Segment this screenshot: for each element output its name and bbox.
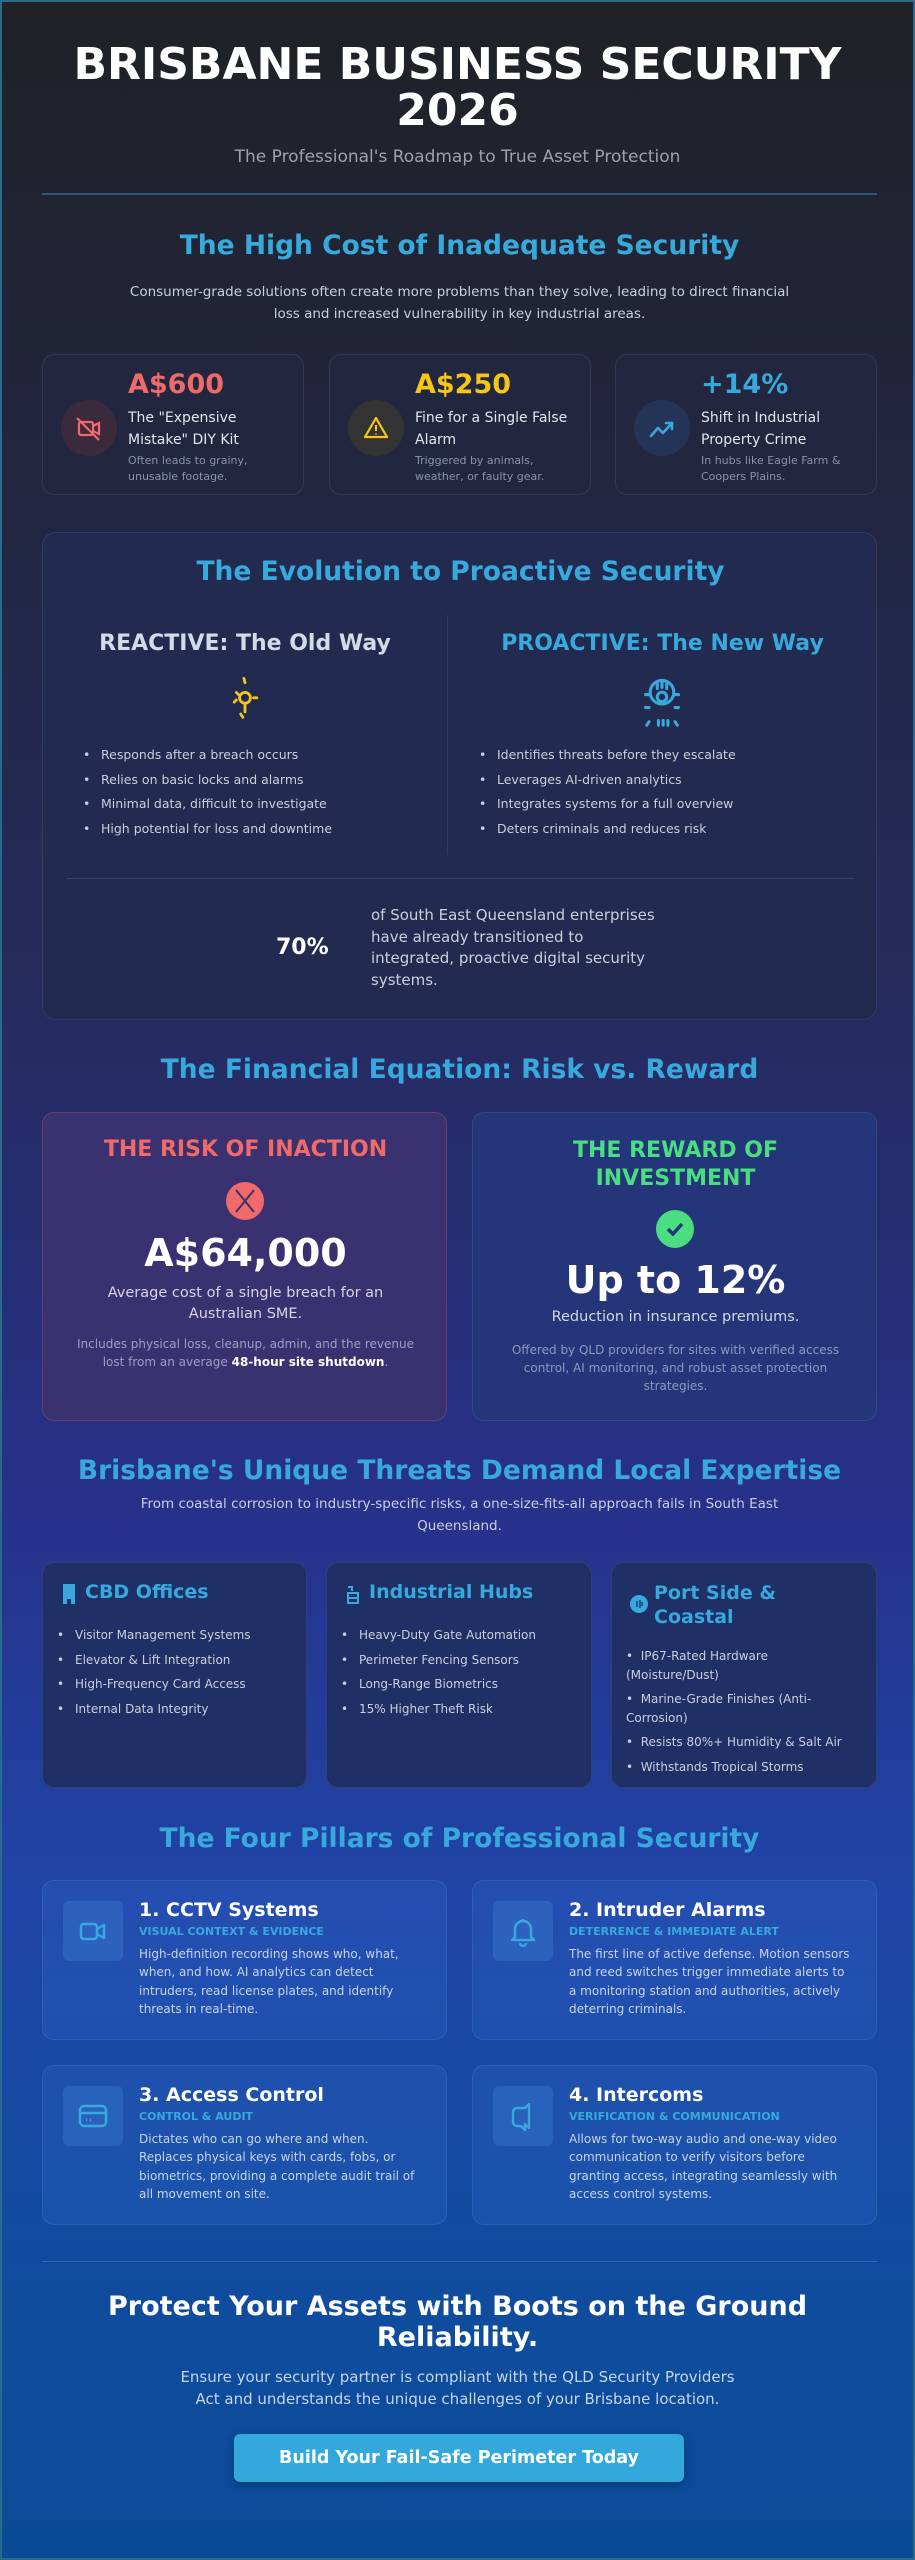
- list: proactive: [480, 747, 736, 836]
- card: CBD Offices: Elevator & Lift Integration: [75, 1652, 230, 1666]
- card: A$250: weather, or faulty gear.: [415, 470, 544, 483]
- card: +14%: +14%: [701, 369, 788, 400]
- pillar: Intruder Alarms: deterring criminals.: [569, 2002, 686, 2016]
- cta button: [234, 2434, 684, 2482]
- list: reactive: Relies on basic locks and alarms: [101, 772, 304, 786]
- pillar: Access Control: 3. Access Control: [139, 2084, 324, 2106]
- panel: reward of investment: [472, 1112, 877, 1421]
- panel: risk of inaction: lost from an average 48-hour site shutdown.: [103, 1355, 388, 1369]
- pillar: Intruder Alarms: and reed switches trigger immediate alerts to: [569, 1965, 844, 1979]
- panel: reward of investment: Offered by QLD providers for sites with verified access: [512, 1343, 839, 1357]
- icon: coastal: [630, 1595, 648, 1613]
- panel: risk of inaction: Average cost of a single breach for an: [108, 1285, 383, 1301]
- panel: reward of investment: INVESTMENT: [596, 1166, 755, 1191]
- heading: local threats: Brisbane's Unique Threats Demand Local Expertise: [78, 1455, 841, 1486]
- column: reactive: [84, 631, 391, 836]
- pillar: CCTV: [42, 1880, 447, 2040]
- heading: financial: The Financial Equation: Risk vs. Reward: [161, 1054, 758, 1085]
- card: +14%: Shift in Industrial: [701, 410, 820, 426]
- pillar: Intruder Alarms: 2. Intruder Alarms: [569, 1899, 766, 1921]
- card: +14%: Coopers Plains.: [701, 470, 785, 483]
- card: Industrial Hubs: Perimeter Fencing Sensors: [359, 1652, 519, 1666]
- card: A$250: [329, 354, 591, 495]
- card: A$250: Triggered by animals,: [415, 454, 533, 467]
- list: reactive: Responds after a breach occurs: [101, 747, 298, 762]
- card: CBD Offices: CBD Offices: [85, 1581, 209, 1603]
- icon: speech: [493, 2086, 553, 2146]
- list: reactive: [84, 747, 332, 836]
- card: A$600: Often leads to grainy,: [128, 454, 247, 467]
- pillar: Intercoms: [472, 2065, 877, 2225]
- stat: 70%: 70%: [276, 935, 329, 960]
- icon: x circle: [226, 1182, 264, 1220]
- panel: reward of investment: THE REWARD OF: [573, 1138, 778, 1163]
- list: proactive: Identifies threats before they escalate: [497, 747, 736, 762]
- icon: trend up: [634, 400, 690, 456]
- card: Port Side & Coastal: Coastal: [654, 1606, 734, 1628]
- cta button: Build Your Fail-Safe Perimeter Today: [279, 2448, 639, 2468]
- column: proactive: PROACTIVE: The New Way: [501, 631, 824, 656]
- card: A$250: Fine for a Single False: [415, 410, 567, 426]
- card: Industrial Hubs: Heavy-Duty Gate Automation: [359, 1628, 536, 1642]
- icon: ai eye: [644, 678, 680, 727]
- list: reactive: High potential for loss and downtime: [101, 820, 332, 836]
- pillar: CCTV: when, and how. AI analytics can detect: [139, 1965, 374, 1979]
- card: +14%: Property Crime: [701, 432, 806, 448]
- card: +14%: [615, 354, 877, 495]
- pillar: CCTV: intruders, read license plates, and identify: [139, 1984, 393, 1998]
- stat: 70%: integrated, proactive digital security: [371, 949, 645, 967]
- panel: reward of investment: strategies.: [644, 1379, 707, 1393]
- heading: evolution: The Evolution to Proactive Security: [196, 556, 725, 587]
- card: Port Side & Coastal: (Moisture/Dust) • Marine-Grade Finishes (Anti-: [626, 1668, 811, 1706]
- intro paragraph: Consumer-grade solutions often create more problems than they solve, leading to direct financial: [130, 284, 789, 300]
- title: 2026: [396, 85, 519, 136]
- panel: reward of investment: Reduction in insurance premiums.: [552, 1309, 799, 1325]
- pillar: Intruder Alarms: The first line of active defense. Motion sensors: [569, 1947, 850, 1961]
- card: Industrial Hubs: 15% Higher Theft Risk: [359, 1702, 493, 1716]
- card: CBD Offices: High-Frequency Card Access: [75, 1677, 246, 1691]
- cta heading: [108, 2291, 807, 2353]
- panel: evolution: [42, 532, 877, 1020]
- cta text: Ensure your security partner is compliant with the QLD Security Providers: [180, 2368, 735, 2386]
- card: A$250: A$250: [415, 369, 511, 400]
- pillar: Intercoms: communication to verify visitors before: [569, 2150, 805, 2164]
- icon: industrial: [347, 1586, 359, 1604]
- icon: bell: [493, 1901, 553, 1961]
- panel: reward of investment: control, AI monitoring, and robust asset protection: [524, 1361, 827, 1375]
- icon: card: [63, 2086, 123, 2146]
- icon: building: [63, 1584, 75, 1604]
- panel: risk of inaction: Australian SME.: [189, 1306, 302, 1322]
- intro paragraph: [130, 284, 789, 322]
- stat: 70%: [276, 906, 655, 988]
- pillar: Access Control: Dictates who can go where and when.: [139, 2132, 368, 2146]
- cta heading: Protect Your Assets with Boots on the Ground: [108, 2291, 807, 2322]
- stat: 70%: of South East Queensland enterprises: [371, 906, 655, 924]
- intro paragraph: loss and increased vulnerability in key industrial areas.: [274, 306, 645, 322]
- panel: risk of inaction: Includes physical loss, cleanup, admin, and the revenue: [77, 1337, 414, 1351]
- list: proactive: Deters criminals and reduces risk: [497, 820, 707, 836]
- card: Industrial Hubs: [326, 1562, 592, 1788]
- heading: four pillars: The Four Pillars of Professional Security: [160, 1823, 759, 1854]
- cta text: Act and understands the unique challenges of your Brisbane location.: [196, 2390, 719, 2408]
- icon: lightbulb: [232, 677, 258, 719]
- pillar: CCTV: threats in real-time.: [139, 2002, 258, 2016]
- pillar: CCTV: High-definition recording shows who, what,: [139, 1947, 399, 1961]
- card: CBD Offices: Visitor Management Systems: [75, 1628, 251, 1642]
- stat cards: [42, 354, 877, 495]
- stat: 70%: have already transitioned to: [371, 928, 583, 946]
- card: A$600: The "Expensive: [128, 410, 237, 426]
- card: Port Side & Coastal: Corrosion) • Resists 80%+ Humidity & Salt Air • Withstands Tropical Storms: [626, 1710, 842, 1774]
- pillar: Intruder Alarms: DETERRENCE & IMMEDIATE ALERT: [569, 1925, 779, 1938]
- list: reactive: Minimal data, difficult to investigate: [101, 796, 327, 811]
- column: reactive: REACTIVE: The Old Way: [99, 631, 391, 656]
- pillar: Access Control: biometrics, providing a complete audit trail of: [139, 2169, 414, 2183]
- card: Industrial Hubs: Long-Range Biometrics: [359, 1677, 498, 1691]
- pillar: Intercoms: granting access, integrating seamlessly with: [569, 2169, 837, 2183]
- pillar: Access Control: all movement on site.: [139, 2187, 270, 2201]
- icon: camera: [63, 1901, 123, 1961]
- cta text: [180, 2368, 735, 2408]
- subheading: local threats: From coastal corrosion to industry-specific risks, a one-size-fits-all approach fails in South East: [141, 1496, 778, 1512]
- subheading: local threats: Queensland.: [417, 1518, 502, 1534]
- subheading: local threats: [141, 1496, 778, 1534]
- card: CBD Offices: [42, 1562, 307, 1788]
- subtitle: The Professional's Roadmap to True Asset Protection: [235, 147, 680, 167]
- cta heading: Reliability.: [377, 2322, 538, 2353]
- card: +14%: In hubs like Eagle Farm &: [701, 454, 840, 467]
- stat: 70%: systems.: [371, 970, 438, 988]
- pillar: Access Control: [42, 2065, 447, 2225]
- panel: reward of investment: Up to 12%: [566, 1258, 785, 1302]
- card: CBD Offices: Internal Data Integrity: [75, 1702, 208, 1716]
- card: A$600: A$600: [128, 369, 224, 400]
- list: proactive: Leverages AI-driven analytics: [497, 772, 682, 786]
- pillar: CCTV: VISUAL CONTEXT & EVIDENCE: [139, 1925, 324, 1938]
- panel: risk of inaction: A$64,000: [144, 1231, 347, 1275]
- column: proactive: [480, 631, 824, 836]
- list: proactive: Integrates systems for a full overview: [497, 796, 733, 811]
- pillar: Intruder Alarms: a monitoring station and authorities, actively: [569, 1984, 840, 1998]
- title: [73, 39, 842, 136]
- card: Port Side & Coastal: • IP67-Rated Hardware: [626, 1649, 768, 1663]
- icon: camera off: [61, 400, 117, 456]
- card: Port Side & Coastal: [611, 1562, 877, 1788]
- card: Port Side & Coastal: Port Side &: [654, 1582, 776, 1604]
- pillar: Intercoms: access control systems.: [569, 2187, 712, 2201]
- pillar: Intercoms: Allows for two-way audio and one-way video: [569, 2132, 837, 2146]
- pillar: Access Control: CONTROL & AUDIT: [139, 2110, 253, 2123]
- icon: check circle: [656, 1210, 694, 1248]
- pillar: Intercoms: VERIFICATION & COMMUNICATION: [569, 2110, 780, 2123]
- card: A$250: Alarm: [415, 432, 456, 448]
- icon: warning: [348, 400, 404, 456]
- card: A$600: [42, 354, 304, 495]
- card: A$600: unusable footage.: [128, 470, 227, 483]
- heading: high cost: The High Cost of Inadequate Security: [180, 230, 739, 261]
- panel: risk of inaction: [42, 1112, 447, 1421]
- panel: risk of inaction: THE RISK OF INACTION: [104, 1137, 387, 1162]
- title: BRISBANE BUSINESS SECURITY: [73, 39, 842, 90]
- pillar: CCTV: 1. CCTV Systems: [139, 1899, 319, 1921]
- card: Industrial Hubs: Industrial Hubs: [369, 1581, 533, 1603]
- pillar: Intruder Alarms: [472, 1880, 877, 2040]
- pillar: Intercoms: 4. Intercoms: [569, 2084, 703, 2106]
- card: A$600: Mistake" DIY Kit: [128, 432, 239, 448]
- pillar: Access Control: Replaces physical keys with cards, fobs, or: [139, 2150, 395, 2164]
